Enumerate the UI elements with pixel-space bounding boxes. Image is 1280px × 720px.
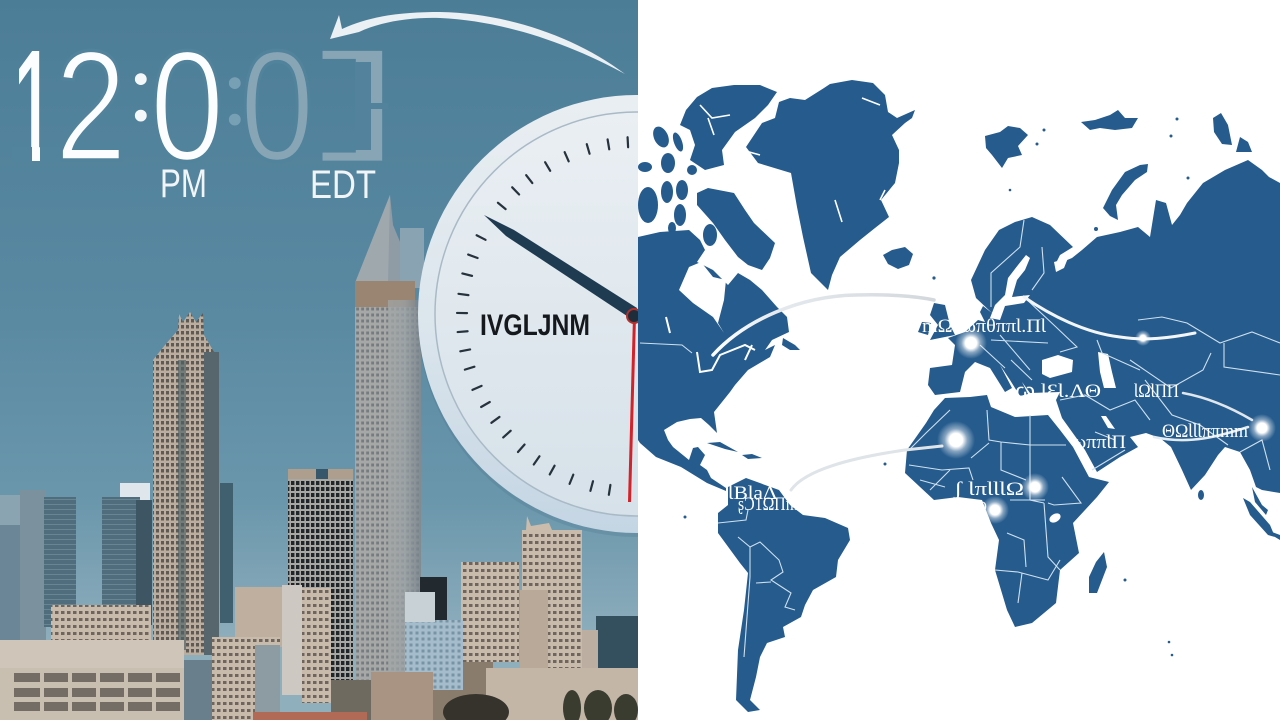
map labels: ʂƆ1ΩΠm — [738, 494, 798, 515]
UK and Ireland — [918, 303, 955, 340]
panel: New York skyline and clock — [0, 0, 638, 720]
Cuba and Hispaniola — [707, 442, 762, 459]
digital time 12:00:0: 0 — [240, 18, 314, 193]
Great Lakes and inland water — [666, 317, 755, 372]
Baltic Sea — [990, 255, 1030, 320]
landmass: Arctic Canada islands — [638, 85, 777, 270]
Svalbard — [985, 126, 1028, 168]
digital time 12:00:0: 0 — [150, 18, 224, 193]
Franz Josef Land — [1081, 110, 1138, 130]
clock centre pin — [627, 309, 641, 323]
landmass: North and Central America — [638, 230, 789, 491]
digital time 12:00:0 — [19, 50, 382, 161]
small islands — [684, 118, 1190, 656]
Hudson Bay — [679, 262, 726, 333]
mid-rise buildings — [331, 680, 371, 720]
map labels — [727, 316, 1248, 519]
PM label: PM — [160, 162, 207, 206]
skyline buildings — [0, 195, 640, 720]
landmass: South America — [718, 478, 850, 712]
Madagascar — [1089, 552, 1107, 593]
Severnaya Zemlya — [1213, 113, 1252, 152]
panel: world map — [638, 0, 1280, 720]
arrow — [330, 12, 625, 74]
clock — [418, 95, 638, 537]
digital time 12:00:0: : — [127, 31, 155, 142]
EDT label: EDT — [310, 163, 376, 207]
Persian Gulf — [1101, 416, 1115, 429]
landmass: Africa — [905, 395, 1109, 627]
digital time 12:00:0: : — [221, 35, 249, 146]
map labels: ʃ ƖπƖƖƖΩ — [953, 479, 1024, 500]
Lake Victoria — [1048, 512, 1062, 524]
digital time 12:00:0: 1 — [12, 20, 56, 194]
dark tower — [288, 478, 353, 683]
clock tick marks — [457, 137, 628, 495]
Caspian Sea — [1098, 352, 1116, 388]
map labels: ωππƖΠ — [1073, 432, 1126, 453]
map labels: ΩΩ — [966, 498, 987, 519]
minute hand — [484, 215, 637, 318]
map labels: mΩ. ωπθππƖ.ΠƖ — [922, 316, 1046, 337]
map labels: ꞷ.ƖƐƖ.ΛΘ — [1015, 381, 1101, 402]
digital time 12:00:0: ] — [321, 30, 402, 161]
red second hand — [628, 316, 636, 502]
country borders — [640, 220, 1280, 657]
sky background — [0, 0, 638, 720]
clock face label: IVGLJNM — [480, 309, 590, 342]
fjords and straits — [700, 98, 885, 222]
map background — [638, 0, 1280, 720]
glowing city points — [937, 327, 1276, 524]
connection arcs — [713, 295, 1252, 490]
beige tower — [153, 312, 218, 655]
landmass: Greenland — [746, 80, 915, 290]
White Sea — [1054, 258, 1068, 272]
Novaya Zemlya — [1103, 164, 1148, 220]
Iceland — [883, 247, 913, 269]
spire tower — [356, 195, 400, 281]
Newfoundland — [782, 338, 800, 350]
Black Sea — [1042, 355, 1073, 378]
Sri Lanka and Southeast Asian islands — [1198, 487, 1280, 540]
map labels: ƖΩƖΠΠ — [1133, 381, 1179, 402]
digital time 12:00:0: 2 — [55, 19, 127, 194]
landmass: Eurasia — [928, 160, 1280, 493]
map labels: ΘΩƖƖƖππmm — [1162, 421, 1248, 442]
map labels: ƖBƖaΔ — [727, 483, 777, 504]
